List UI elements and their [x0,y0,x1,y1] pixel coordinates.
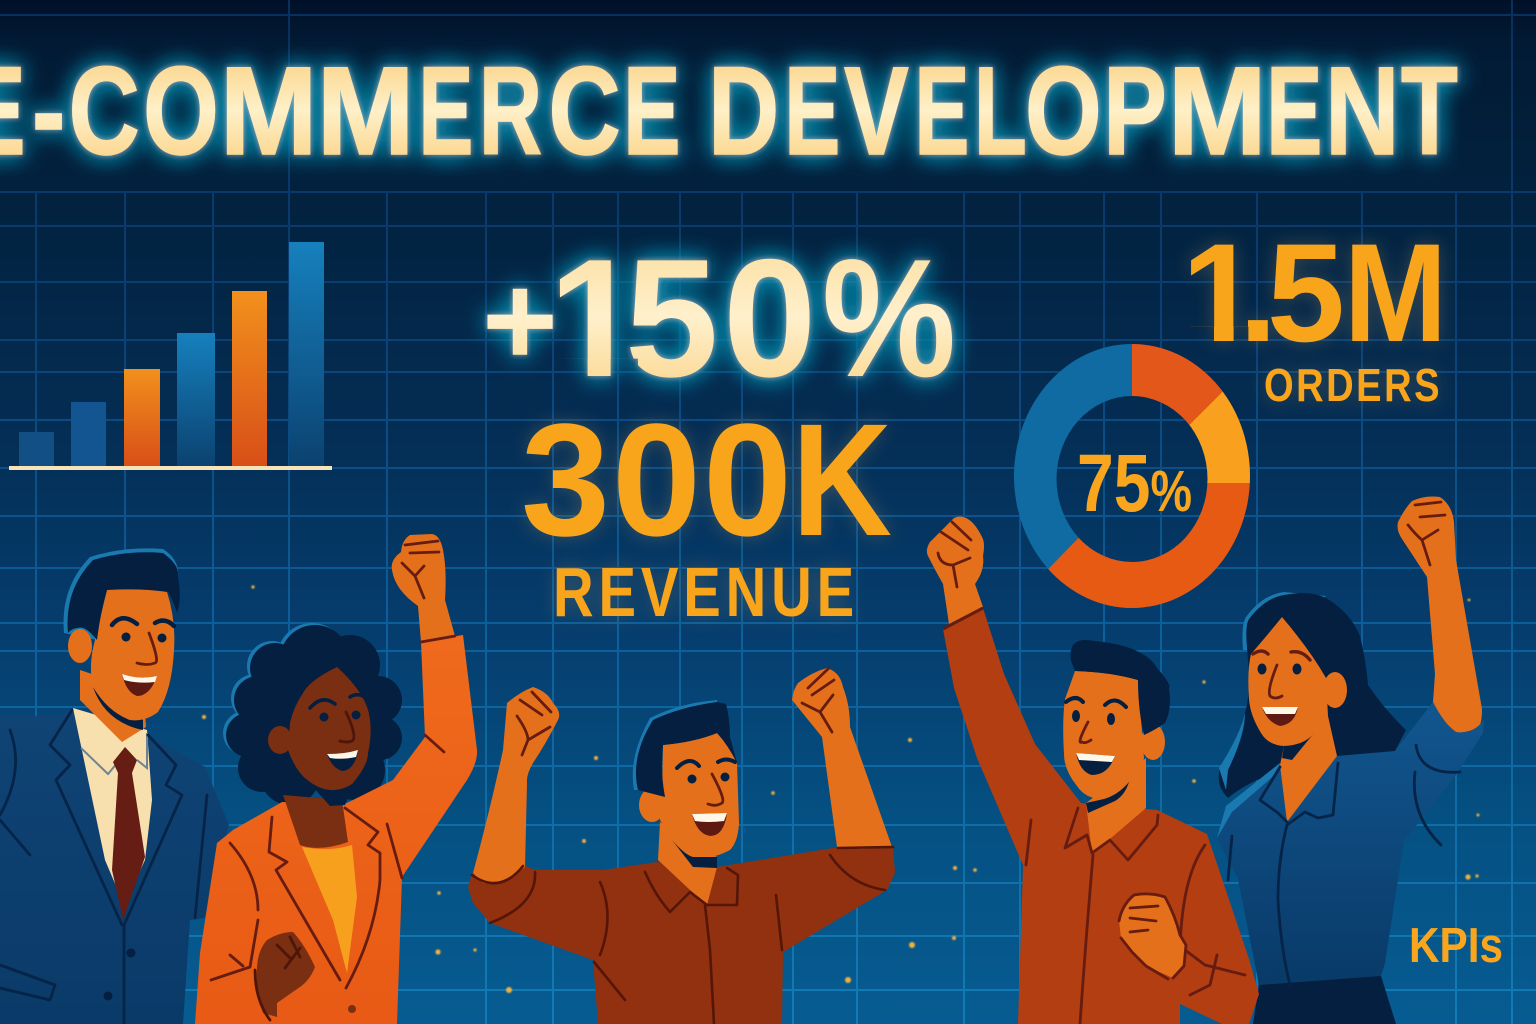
title: C [69,42,140,181]
title: T [1401,42,1458,181]
title: L [974,42,1027,181]
title: O [143,42,219,181]
stat: +150%: % [822,224,956,412]
title: V [844,42,909,181]
title: E [623,42,680,181]
title: E [418,42,473,181]
title: D [708,42,779,181]
title: R [479,42,542,181]
stat: +150% [473,240,970,395]
donut chart: 75% [1077,438,1192,529]
label: revenue: REVENUE [553,553,859,631]
stat: +150%: 150 [548,224,816,412]
person: man in suit [0,548,229,1024]
title: - [32,42,65,181]
title: M [317,42,415,181]
person: man in red shirt [927,516,1259,1024]
label: KPIs: KPIs [1409,919,1503,973]
title: E [784,42,840,181]
bar chart [9,242,332,470]
title: N [1325,42,1400,181]
title: O [1025,42,1102,181]
label: orders: ORDERS [1264,359,1442,411]
title: C [548,42,621,181]
title: E [914,42,969,181]
donut chart [1014,344,1250,608]
stat: +150%: + [482,247,558,393]
title: P [1103,42,1167,181]
stat: 300K: K [792,390,892,569]
title: M [1168,42,1267,181]
stat: 300K: 300 [521,390,792,569]
stat: 1.5M [1186,236,1448,350]
title: E [1266,42,1322,181]
title: M [220,42,318,181]
person: woman in blue shirt [1217,496,1484,1024]
stat: 1.5M: 1.5 [1182,214,1345,371]
person: man in center [468,668,895,1024]
stat: 1.5M: M [1344,214,1447,371]
person: woman with curly hair [195,534,477,1024]
